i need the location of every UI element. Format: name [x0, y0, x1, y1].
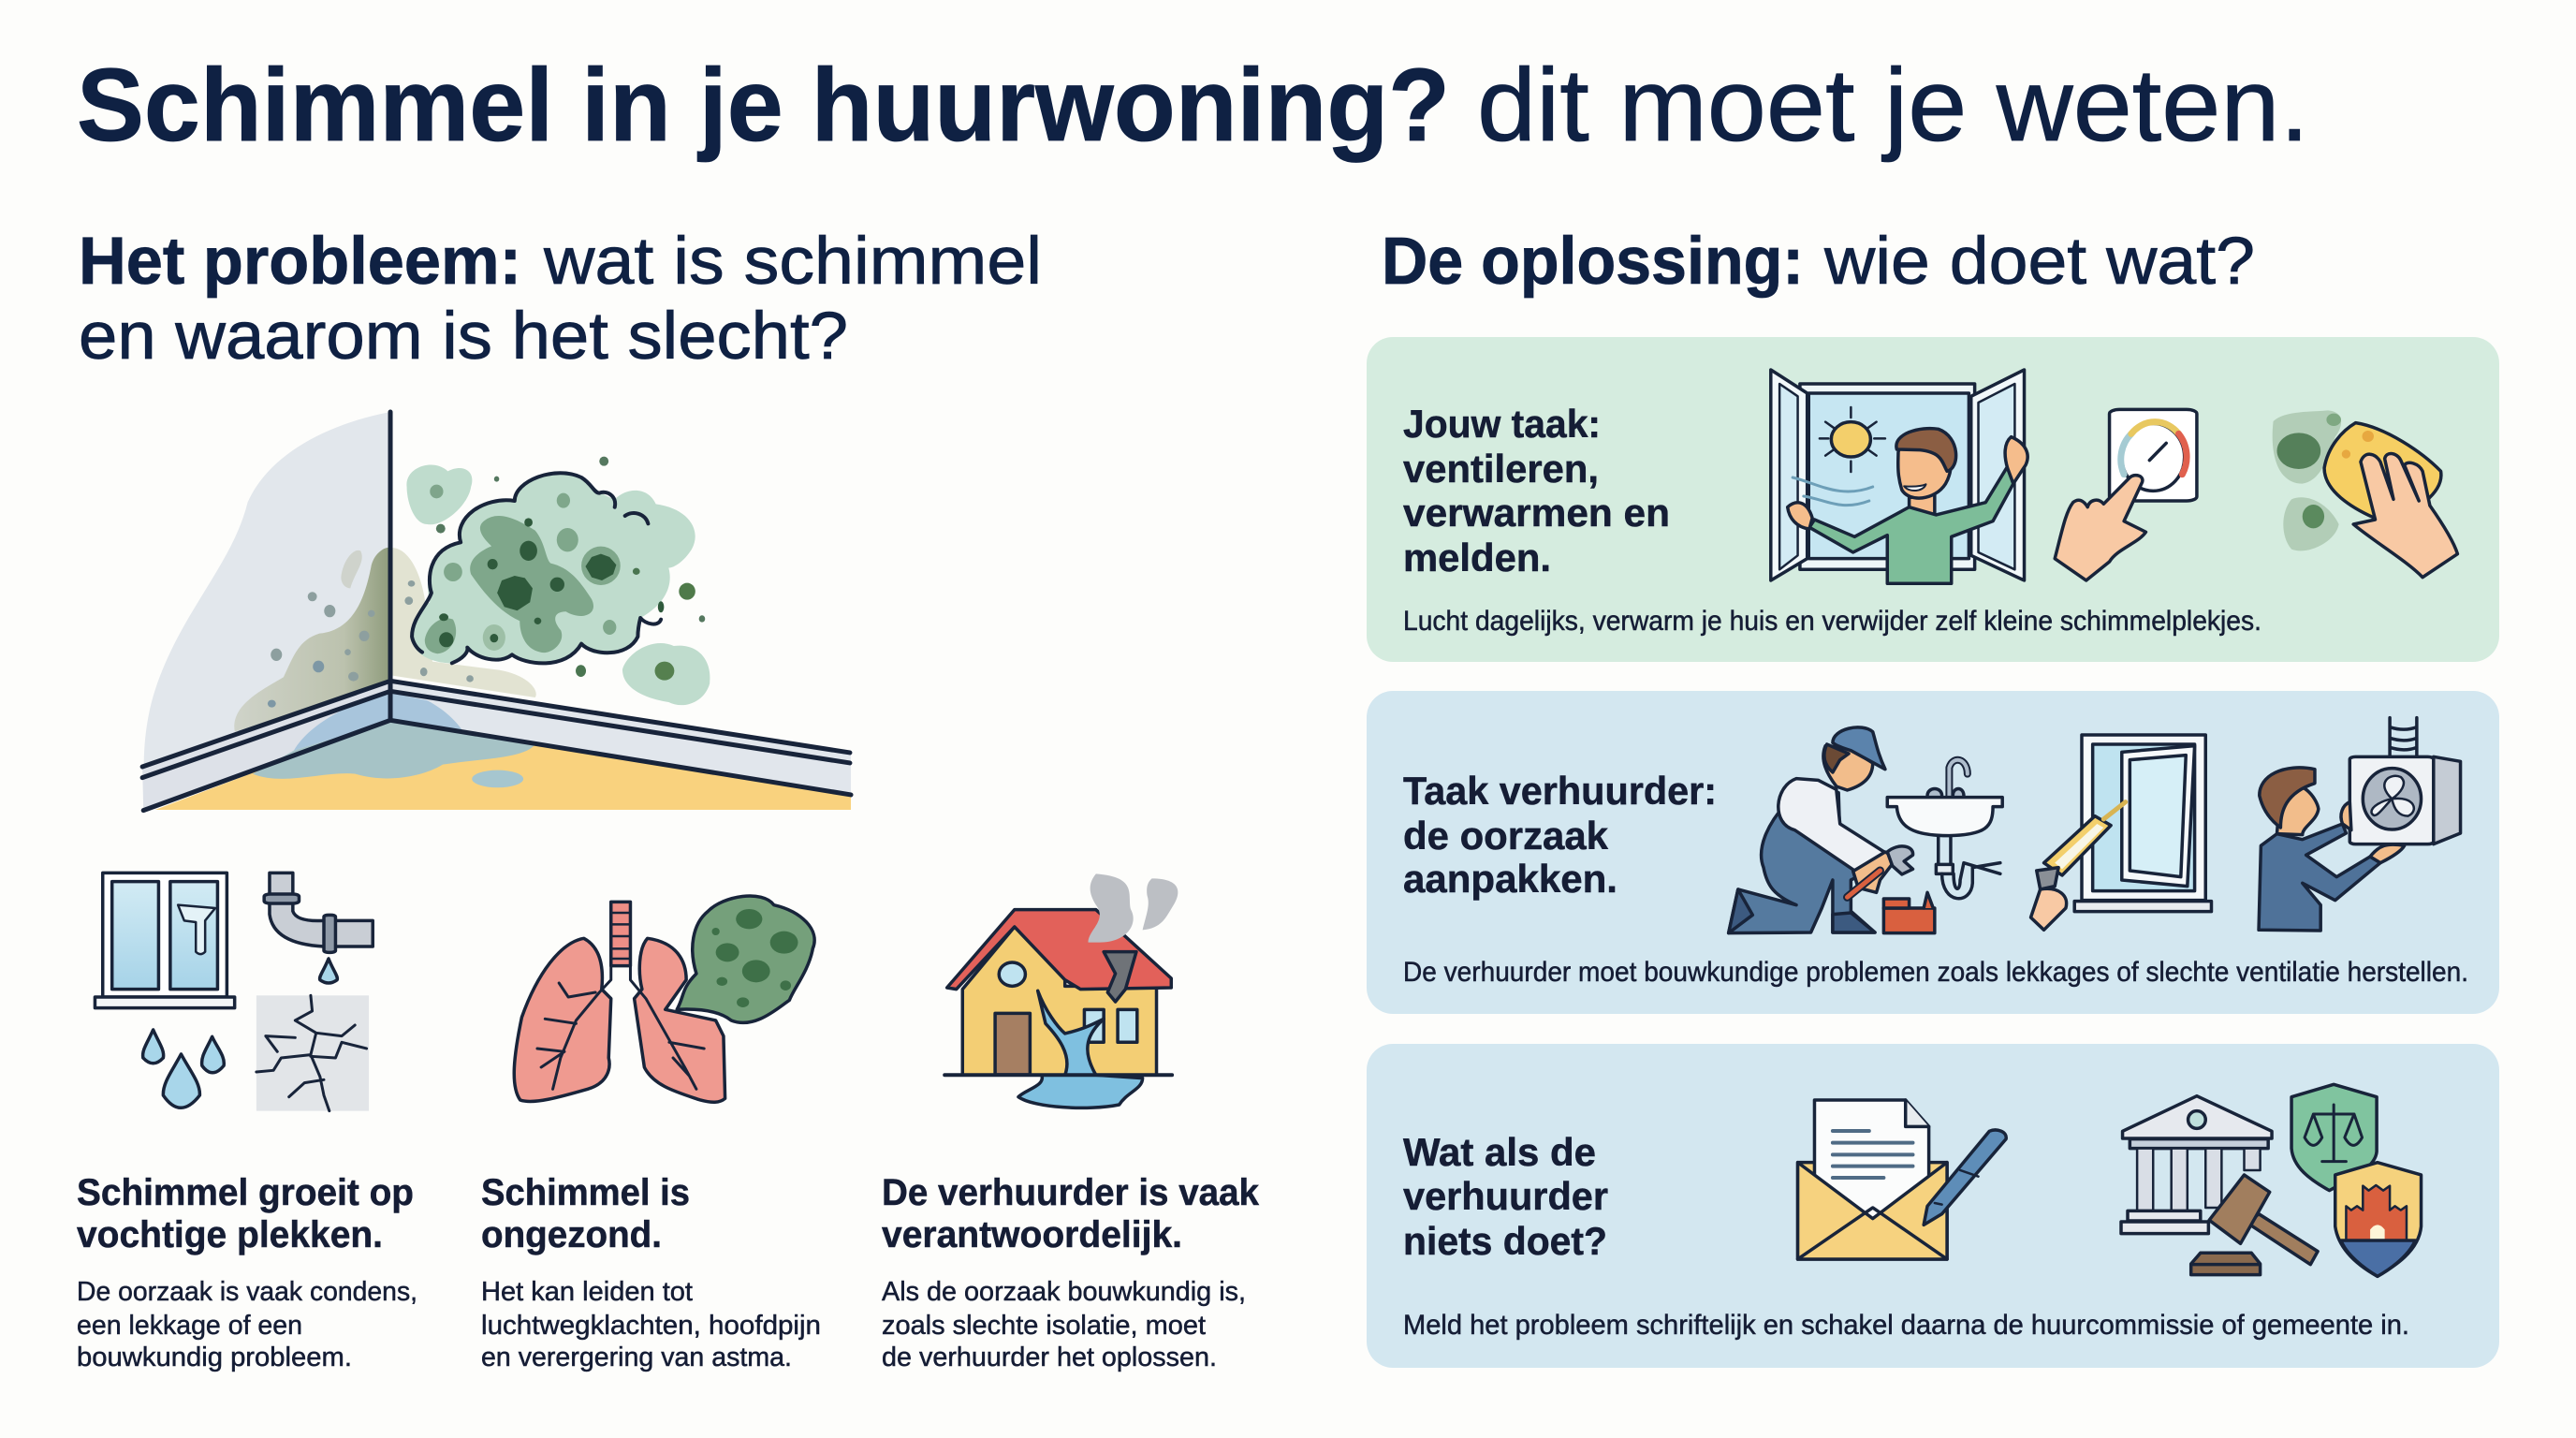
text block: schimmel groeit: [77, 1172, 417, 1372]
panel heading: aanpakken.: [1403, 857, 1617, 901]
icon: green shield with scales: [2291, 1084, 2377, 1191]
panel heading: de oorzaak: [1403, 814, 1609, 858]
lungs: [514, 902, 725, 1102]
panel heading: ventileren,: [1403, 447, 1599, 491]
icon: technician with fan unit: [2259, 718, 2461, 931]
puddle: [253, 721, 535, 779]
text block: schimmel is ongezond: ongezond.: [481, 1214, 662, 1255]
panel description: Meld het probleem schriftelijk en schakel daarna de huurcommissie of gemeente in.: [1403, 1310, 2409, 1341]
text block: verhuurder verantwoordelijk: [882, 1172, 1260, 1372]
icon: sealing window frame: [2031, 735, 2211, 930]
panel: taak verhuurder: [1367, 691, 2499, 1014]
icon: moisture causes: [95, 873, 1178, 1111]
panel heading: verwarmen en: [1403, 491, 1670, 535]
title: Schimmel in je huurwoning?: [77, 48, 1450, 163]
icon: cleaning mold with sponge: [2273, 410, 2457, 578]
cracked wall: [256, 995, 369, 1111]
water drops: [143, 1030, 224, 1108]
panel heading: Jouw taak:: [1403, 402, 1601, 446]
panel heading: melden.: [1403, 536, 1551, 580]
panel description: Lucht dagelijks, verwarm je huis en verwijder zelf kleine schimmelplekjes.: [1403, 606, 2261, 637]
heading: de oplossing: [1382, 225, 2255, 299]
text block: schimmel groeit: een lekkage of een: [77, 1311, 302, 1341]
panel heading: [1403, 402, 1670, 580]
text block: schimmel is ongezond: luchtwegklachten, hoofdpijn: [481, 1311, 821, 1341]
panel: jouw taak: [1367, 337, 2499, 662]
mold cloud: [406, 465, 472, 524]
icon: plumber repairing sink: [1729, 727, 2002, 933]
heading: de oplossing: De oplossing:: [1382, 225, 1804, 299]
heading: de oplossing: wie doet wat?: [1823, 225, 2255, 299]
heading: het probleem: [79, 225, 1042, 374]
mold cloud near lungs: [677, 896, 814, 1022]
panel heading: [1403, 769, 1717, 901]
title: dit moet je weten.: [1477, 48, 2309, 163]
text block: schimmel groeit: De oorzaak is vaak condens,: [77, 1277, 417, 1307]
text block: verhuurder verantwoordelijk: de verhuurder het oplossen.: [882, 1343, 1217, 1372]
window with condensation: [95, 873, 235, 1008]
title: [77, 48, 2309, 163]
text block: schimmel is ongezond: Het kan leiden tot: [481, 1277, 693, 1307]
panel heading: niets doet?: [1403, 1219, 1607, 1263]
icon: person at open window: [1771, 370, 2027, 583]
panel heading: Wat als de: [1403, 1130, 1596, 1174]
house with leak: [944, 873, 1178, 1108]
panel heading: verhuurder: [1403, 1174, 1608, 1218]
text block: schimmel is ongezond: Schimmel is: [481, 1172, 690, 1213]
text block: schimmel groeit: Schimmel groeit op: [77, 1172, 414, 1213]
panel heading: Taak verhuurder:: [1403, 769, 1717, 813]
text block: verhuurder verantwoordelijk: De verhuurder is vaak: [882, 1172, 1260, 1213]
panel heading: [1403, 1130, 1608, 1263]
illustration: mold in room corner: [142, 412, 851, 811]
text block: verhuurder verantwoordelijk: zoals slechte isolatie, moet: [882, 1311, 1206, 1341]
icon: letter and pen: [1798, 1100, 2006, 1259]
heading: het probleem: Het probleem:: [79, 225, 521, 299]
text block: schimmel groeit: vochtige plekken.: [77, 1214, 383, 1255]
icon: court building and gavel: [2121, 1096, 2318, 1275]
leaking pipe: [264, 873, 373, 983]
heading: het probleem: wat is schimmel: [543, 225, 1042, 299]
icon: thermostat and hand: [2055, 409, 2197, 580]
floor: [155, 721, 851, 810]
text block: schimmel groeit: bouwkundig probleem.: [77, 1343, 352, 1372]
panel: wat als de verhuurder niets doet: [1367, 1044, 2499, 1368]
text block: verhuurder verantwoordelijk: verantwoordelijk.: [882, 1214, 1182, 1255]
text block: schimmel is ongezond: [481, 1172, 821, 1372]
text block: schimmel is ongezond: en verergering van astma.: [481, 1343, 792, 1372]
baseboards: [142, 681, 390, 810]
panel description: De verhuurder moet bouwkundige problemen zoals lekkages of slechte ventilatie herstellen.: [1403, 957, 2468, 988]
text block: verhuurder verantwoordelijk: Als de oorzaak bouwkundig is,: [882, 1277, 1246, 1307]
icon: yellow municipal shield with castle: [2335, 1163, 2422, 1276]
heading: het probleem: en waarom is het slecht?: [79, 300, 848, 374]
